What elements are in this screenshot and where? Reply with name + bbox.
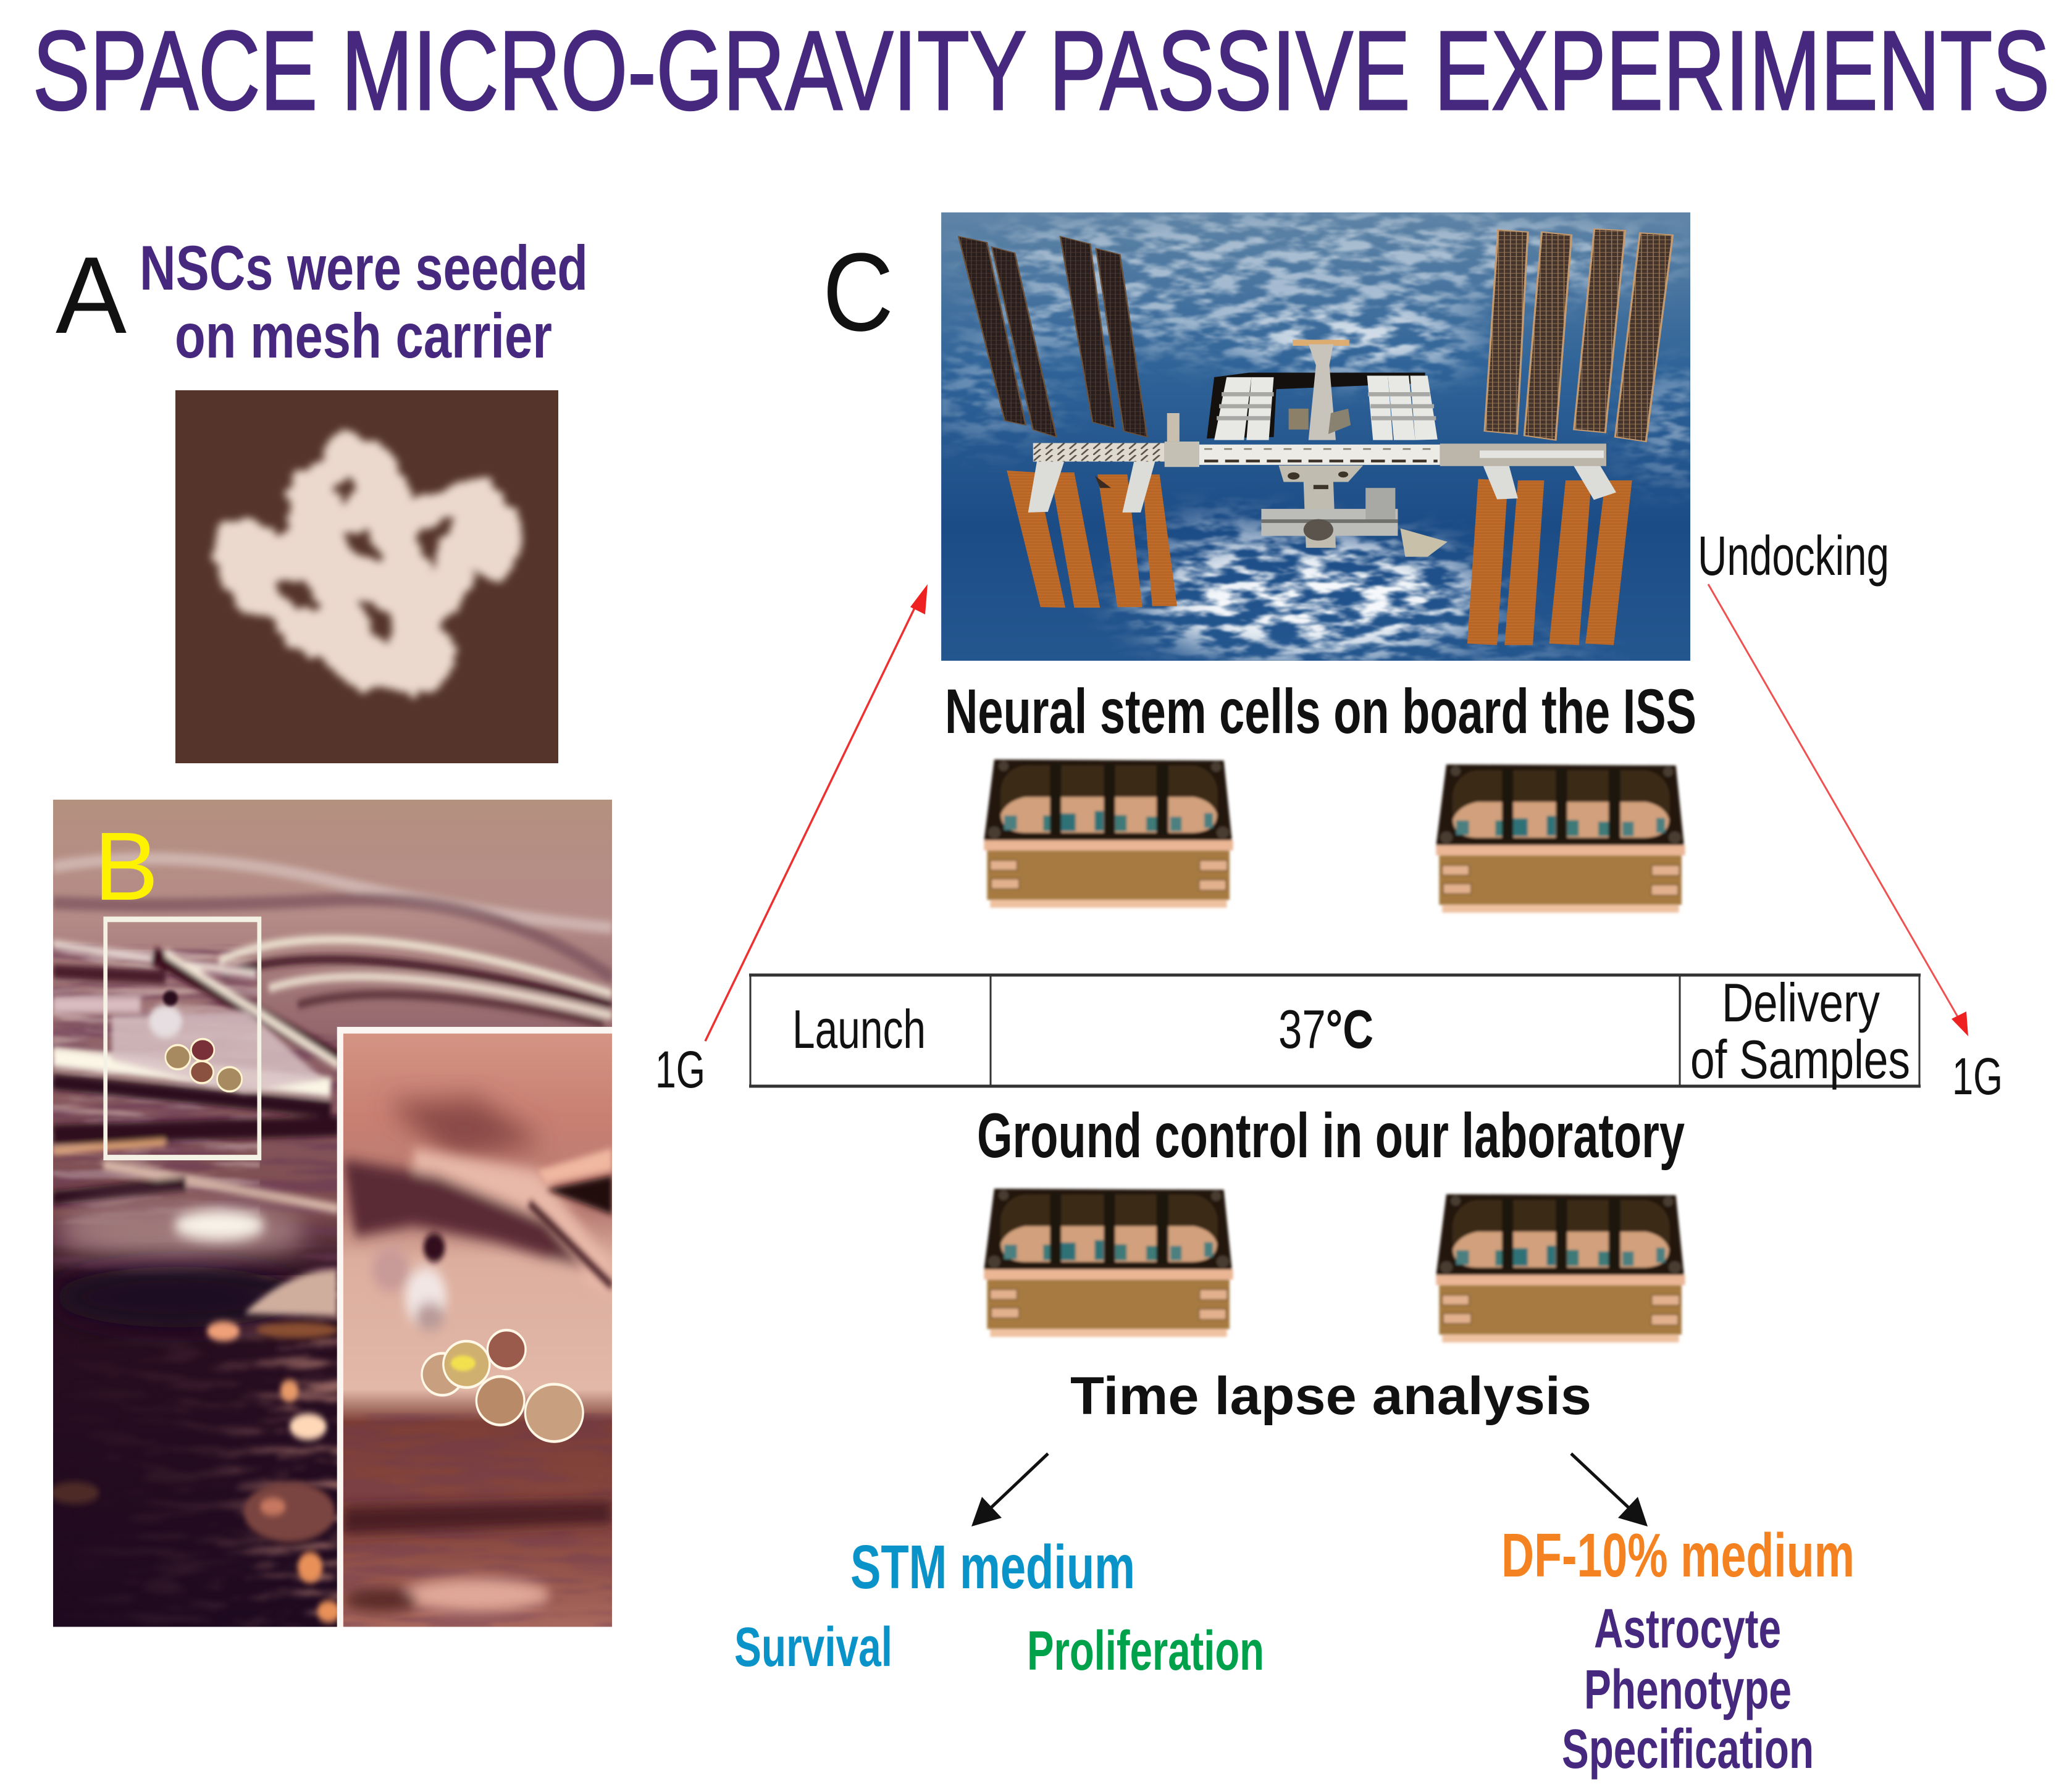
heading: Time lapse analysis: Time lapse analysis <box>1070 1367 1591 1426</box>
outcome: Astrocyte Phenotype Specification <box>1562 1598 1814 1780</box>
arrow: launch to ISS <box>705 584 928 1041</box>
sample tray: ground left <box>984 1189 1233 1337</box>
label: 1G launch side: 1G <box>655 1040 705 1099</box>
central modules and Soyuz <box>1261 340 1448 557</box>
panel letter A: A <box>56 234 127 356</box>
upper left solar arrays <box>958 237 1147 437</box>
panel letter C: C <box>823 230 894 354</box>
lower left solar arrays <box>1007 471 1177 608</box>
outcome: Astrocyte Phenotype Specification: Specification <box>1562 1719 1814 1780</box>
DF-10% medium outcomes <box>1501 1521 1855 1780</box>
inset magnification <box>337 1027 612 1627</box>
label: 1G return side: 1G <box>1952 1047 2003 1105</box>
heading: NSCs seeded on mesh carrier: NSCs were seeded <box>140 233 588 303</box>
panel A: seeded mesh carrier <box>56 233 588 763</box>
label: Undocking: Undocking <box>1698 525 1889 587</box>
outcome: Proliferation: Proliferation <box>1027 1620 1264 1682</box>
highlight box on wide micrograph <box>106 919 259 1158</box>
outcome: Astrocyte Phenotype Specification: Astrocyte <box>1594 1598 1781 1660</box>
cell: Launch: Launch <box>792 999 926 1060</box>
timeline table <box>749 972 1921 1090</box>
heading: Neural stem cells on board the ISS: Neural stem cells on board the ISS <box>945 676 1696 747</box>
photo: International Space Station over Earth <box>941 212 1691 661</box>
heading: NSCs seeded on mesh carrier: on mesh carrier <box>175 301 552 371</box>
lower right solar arrays <box>1467 479 1632 645</box>
heading: DF-10% medium: DF-10% medium <box>1501 1521 1855 1590</box>
cell: temperature: 37°C <box>1278 999 1373 1060</box>
cell: Delivery of Samples: of Samples <box>1690 1029 1910 1090</box>
photo: wide micrograph <box>49 800 612 1628</box>
arrow: undocking to return <box>1708 584 1968 1036</box>
outcome: Astrocyte Phenotype Specification: Phenotype <box>1584 1659 1792 1721</box>
upper right solar arrays <box>1485 229 1673 442</box>
central radiators <box>1207 373 1438 440</box>
sample tray: flight left <box>984 760 1233 908</box>
arrow: to STM medium <box>971 1454 1048 1526</box>
arrow: to DF-10% medium <box>1571 1454 1648 1526</box>
main truss <box>1033 413 1606 467</box>
panel B: micrograph with inset <box>49 800 612 1628</box>
outboard radiators <box>1028 462 1616 513</box>
heading: Ground control in our laboratory: Ground control in our laboratory <box>977 1100 1685 1171</box>
cell: Delivery of Samples <box>1690 972 1910 1090</box>
cell: Delivery of Samples: Delivery <box>1722 972 1880 1033</box>
photo: mesh carrier <box>175 390 558 763</box>
heading: STM medium: STM medium <box>850 1533 1135 1602</box>
panel letter B: B <box>94 813 159 921</box>
sample tray: flight right <box>1436 764 1685 913</box>
sample tray: ground right <box>1436 1194 1685 1342</box>
STM medium outcomes <box>734 1533 1264 1682</box>
heading: NSCs seeded on mesh carrier <box>140 233 588 371</box>
outcome: Survival: Survival <box>734 1617 892 1678</box>
